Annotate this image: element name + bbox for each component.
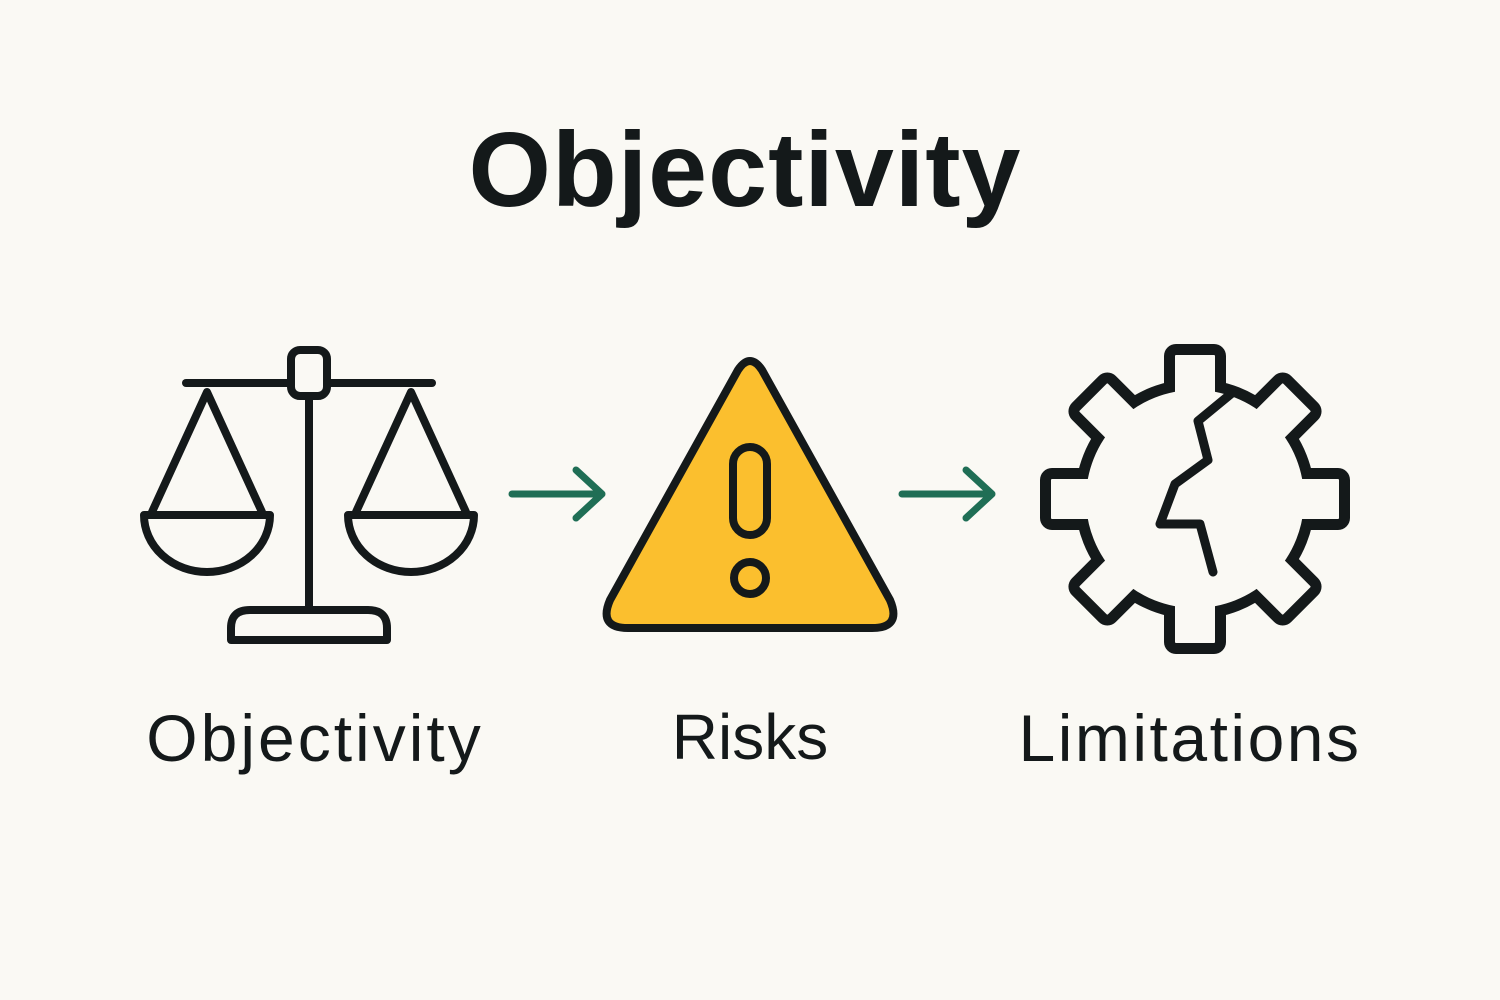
title: Objectivity [469,111,1021,229]
label: Limitations: Limitations [1019,701,1361,775]
icon: broken gear [1052,356,1338,642]
label: Risks: Risks [672,701,828,773]
icon: warning triangle [607,361,893,628]
arrow 2 [902,470,992,518]
arrow 1 [512,470,602,518]
label: Objectivity: Objectivity [146,701,484,775]
icon: scale [144,350,474,640]
